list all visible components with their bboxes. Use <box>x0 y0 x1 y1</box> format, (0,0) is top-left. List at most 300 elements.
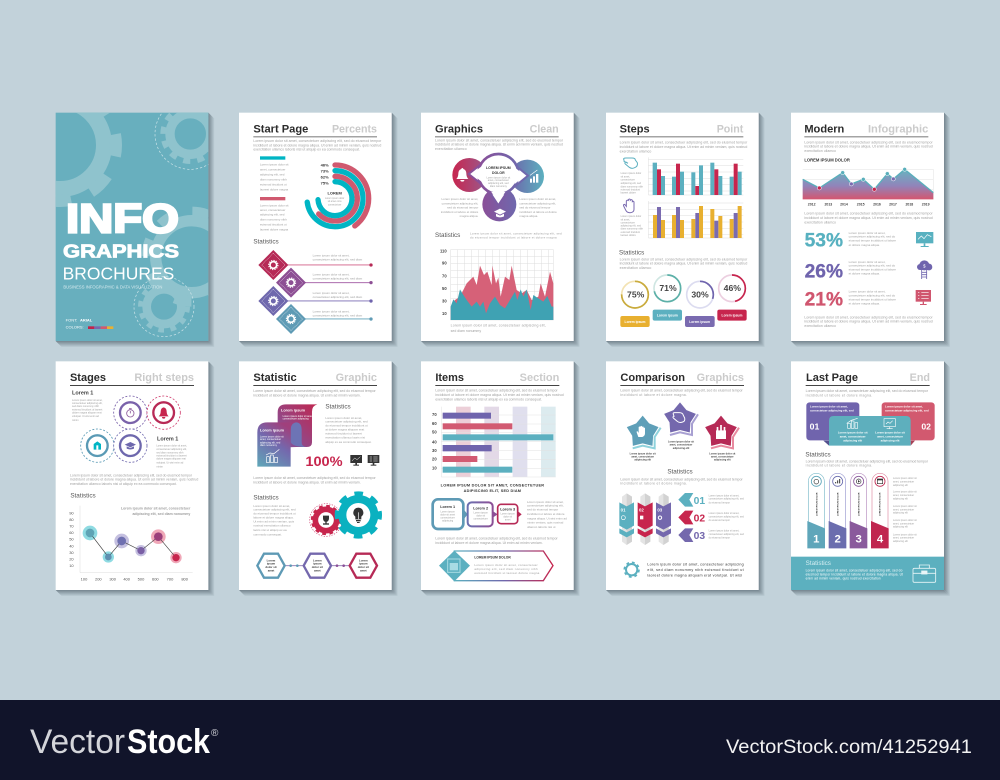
steps text upper: laoreet dolore <box>621 192 636 195</box>
star captions: amet, consectetuer <box>631 455 654 458</box>
steps text lower: sit amet, <box>621 218 630 221</box>
chart text: incididunt ut labore et dolore magna aliqua. Ut enim ad minim veniam, quis nostrud <box>804 216 933 220</box>
heading: Graphic <box>336 372 377 384</box>
heading: Items <box>435 372 464 384</box>
intro text <box>253 389 376 397</box>
progress rings <box>622 275 745 308</box>
pillar 4 <box>871 473 889 548</box>
isometric columns <box>619 493 671 545</box>
banner with diamond icon: Lorem ipsum dolor sit amet, consectetuer <box>474 563 538 567</box>
text block lower: laoris nisi ut aliquip ex ea <box>253 528 287 532</box>
heading: Right steps <box>134 372 194 384</box>
statistics text: adipiscing elit, sed diam nonummy <box>132 512 190 516</box>
heading <box>253 372 377 386</box>
star captions: adipiscing elit <box>634 459 651 462</box>
chart caption: sed diam nonummy <box>451 329 481 333</box>
heading <box>253 123 377 137</box>
numbered pillars <box>807 473 889 548</box>
middle text: Lorem ipsum dolor sit amet, consectetuer adipiscing elit, sed do eiusmod tempor <box>435 537 558 541</box>
steps text lower: euismod tincidunt <box>621 231 640 234</box>
intro text: incididunt ut labore et dolore magna. <box>620 393 687 397</box>
closing text: Lorem ipsum dolor sit amet, consectetuer adipiscing elit, sed do eiusmod tempor <box>804 315 933 319</box>
steps text upper: adipiscing elit, sed <box>621 182 642 185</box>
hexagon process: dolor sit <box>358 565 369 569</box>
text column with colour bars: laoreet dolore magna <box>260 227 289 231</box>
subheading: ADIPISCING ELIT, SED DIAM <box>464 489 521 493</box>
steps text upper: sit amet, <box>621 175 630 178</box>
text column with colour bars: euismod tincidunt ut <box>260 182 287 186</box>
labelled buttons: Lorem ipsum <box>625 320 645 324</box>
logo: Vector <box>30 723 125 761</box>
heading: statistics lower: Statistics <box>253 494 279 501</box>
star captions: adipiscing elit <box>673 447 689 450</box>
pillar 3 <box>850 473 867 548</box>
text block: lorem 1: volutpat. Ut wisi enim ad <box>72 415 100 418</box>
circle diagram: DOLOR <box>492 171 505 175</box>
flanking text: consectetuer adipiscing elit, <box>519 201 556 205</box>
stat: 21% <box>805 289 931 310</box>
cover title: BROCHURES <box>63 263 174 283</box>
folded ribbons: amet, consectetuer <box>260 438 281 441</box>
horizontal bar chart: 50 <box>432 429 437 434</box>
statistics text: Lorem ipsum dolor sit amet, consectetuer adipiscing elit, sed do eiusmod tempor <box>620 257 748 261</box>
colour swatch bar <box>88 326 113 329</box>
cover title: COLORS: <box>66 325 84 330</box>
panel: last page <box>791 361 950 596</box>
area chart: 110 <box>440 248 447 253</box>
labelled buttons: Lorem ipsum <box>657 314 678 318</box>
intro text: Lorem ipsum dolor sit amet, consectetuer adipiscing elit, sed do eiusmod tempor <box>804 140 933 144</box>
flanking text: sed do eiusmod tempor <box>519 206 551 210</box>
numbered chevrons: Lorem ipsum dolor sit amet, <box>709 530 740 533</box>
pillar 4: 4 <box>877 534 884 546</box>
icon: outlined bars <box>847 418 858 428</box>
bubble line chart: 400 <box>123 576 131 581</box>
hexagon process: amet <box>268 568 274 572</box>
panel: statistic <box>239 361 398 596</box>
footer band: eiusmod tempor incididunt ut labore et dolore magna aliqua. Ut <box>806 573 903 577</box>
text block: aliquip ex ea commodo consequat. <box>325 440 372 444</box>
heading: Steps <box>620 123 650 135</box>
text block lower: Ut enim ad minim veniam, quis <box>253 520 295 524</box>
banner with diamond icon: LOREM IPSUM DOLOR <box>474 556 511 560</box>
intro text: exercitation ullamco <box>804 149 836 153</box>
text block: consectetuer adipiscing elit, <box>527 504 564 508</box>
text block: lorem 1 right: dolore magna aliquam erat <box>156 458 186 461</box>
overlapping info cards: consectetuer adipiscing elit, sed <box>885 409 929 413</box>
stat: 26%: Lorem ipsum dolor sit amet, <box>849 260 886 264</box>
pillar 1 <box>807 473 825 548</box>
bubble line chart: 600 <box>152 576 159 581</box>
heading: Last Page <box>806 372 858 384</box>
text column with colour bars: euismod tincidunt ut <box>260 223 287 227</box>
connected boxes: Lorem 3 <box>500 507 515 511</box>
heading: Stages <box>70 372 106 384</box>
statistics text: incididunt ut labore et dolore magna. <box>806 464 872 468</box>
statistics text: Lorem ipsum dolor sit amet, consectetuer adipiscing elit, sed do eiusmod tempor <box>806 460 929 464</box>
numbered chevrons: do eiusmod tempor <box>709 501 730 504</box>
banner with diamond icon <box>439 551 553 581</box>
intro text: Lorem ipsum dolor sit amet, consectetuer adipiscing elit, sed do eiusmod tempor <box>806 389 929 393</box>
area chart: years: 2018 <box>905 203 913 207</box>
heading: Graphics <box>435 123 483 135</box>
bubble line chart: 200 <box>95 576 102 581</box>
heading: Start Page <box>253 123 308 135</box>
middle text <box>435 537 558 545</box>
text block: Lorem ipsum dolor sit amet, <box>325 416 362 420</box>
numbered chevrons: consectetuer adipiscing elit, sed <box>709 498 744 501</box>
text block lower: nostrud exercitation ullamco <box>253 524 291 528</box>
statistics text: Lorem ipsum dolor sit amet, consectetuer <box>121 506 191 510</box>
connected boxes: Lorem ipsum <box>440 511 455 514</box>
progress rings: 71% <box>659 283 677 293</box>
pillar 2: LOREM IPSUM DOLOR <box>838 492 840 516</box>
star: pointing hand <box>664 402 698 435</box>
connected boxes <box>433 499 522 529</box>
hexagon process: amet <box>360 568 367 572</box>
steps text upper: consectetuer <box>621 179 635 182</box>
closing text: laoreet dolore magna aliquam erat volutpal. Ut wisi <box>647 574 742 578</box>
area chart: 70 <box>442 273 447 278</box>
intro text: incididunt ut labore et dolore magna. <box>806 393 872 397</box>
bubble line chart: 30 <box>69 550 74 555</box>
bar chart: teal and red <box>648 157 743 195</box>
text block: lorem 1 right: Lorem 1 <box>157 436 178 442</box>
circle diagram: Lorem ipsum dolor sit <box>486 176 511 179</box>
subheading: LOREM IPSUM DOLOR SIT AMET, CONSECTETUER <box>441 483 544 487</box>
stat: 53% <box>805 231 933 252</box>
heading: statistics: Statistics <box>667 468 693 475</box>
column 03: 03 <box>657 508 663 513</box>
icon: dark monitors <box>350 455 379 466</box>
text block lower: consectetuer adipiscing elit, sed <box>253 508 296 512</box>
stage: bell <box>147 396 180 429</box>
text block: minim veniam, quis nostrud <box>527 521 564 525</box>
radial percent chart: 73% <box>321 169 329 174</box>
chart caption <box>451 324 546 333</box>
statistics text: do eiusmod tempor incididunt ut labore et dolore magna <box>470 235 557 239</box>
bubble line chart: 700 <box>167 576 174 581</box>
numbered chevrons: Lorem ipsum dolor sit amet, <box>709 512 740 515</box>
gears: trophy and bulb <box>310 494 379 536</box>
text block: exercitation ullamco laoris nisi <box>325 436 365 440</box>
bubble line chart: 20 <box>69 556 74 561</box>
cover title: ARIAL <box>80 318 93 323</box>
subheading <box>441 483 544 493</box>
heading: Infographic <box>868 123 928 135</box>
connected boxes: consectetuer <box>441 517 455 520</box>
horizontal bar chart: 70 <box>432 412 437 417</box>
cover title: GRAPHICS <box>63 240 179 261</box>
text column with colour bars: diam nonummy nibh <box>260 177 287 181</box>
text block: lorem 1 right: minim <box>156 466 163 469</box>
steps text lower: Lorem ipsum dolor <box>621 215 641 218</box>
icon: bars and arrow <box>530 170 538 183</box>
radial percent chart: 62% <box>321 175 329 180</box>
statistics text: incididunt ut labore et dolore magna aliqua. Ut enim ad minim veniam, quis nostrud <box>620 262 747 266</box>
stat: 53%: et dolore magna aliqua. <box>849 243 880 247</box>
star captions: adipiscing elit <box>714 459 731 462</box>
radial percent chart: LOREM <box>327 191 343 196</box>
steps text lower: adipiscing elit, sed <box>621 225 642 228</box>
diamond timeline <box>258 250 373 334</box>
intro text: exercitation ullamco laboris nisi ut aliquip ex ea commodo consequat. <box>435 397 542 401</box>
intro text: Lorem ipsum dolor sit amet, consectetuer adipiscing elit, sed do eiusmod tempor <box>70 474 193 478</box>
heading: Percents <box>332 123 377 135</box>
hexagon process: ipsum <box>313 562 322 566</box>
text block: lorem 1: euismod tincidunt ut laoreet <box>72 408 103 411</box>
cover title: BUSINESS INFOGRAPHIC & DATA VISUALIZATION <box>63 284 162 289</box>
flanking text: Lorem ipsum dolor sit amet, <box>442 197 478 201</box>
connected boxes: Lorem 1 <box>440 505 456 509</box>
bubble line chart: 800 <box>181 576 189 581</box>
hexagon process: ipsum <box>267 562 276 566</box>
connected boxes: Lorem ipsum <box>473 512 488 515</box>
statistics text: Lorem ipsum dolor sit amet, consectetuer adipiscing elit, sed <box>470 231 562 235</box>
numbered chevrons: do eiusmod tempor <box>709 536 730 539</box>
folded ribbons: Lorem ipsum dolor sit amet, <box>283 415 314 418</box>
heading: Comparison <box>620 372 685 384</box>
intro text: Lorem ipsum dolor sit amet, consectetuer adipiscing elit, sed do eiusmod tempor <box>620 389 743 393</box>
text block: lorem 1 right <box>156 436 187 469</box>
closing text: Lorem ipsum dolor sit amet, consectetuer adipiscing <box>647 563 744 567</box>
folded ribbons <box>257 404 317 467</box>
folded ribbons: consectetuer adipiscing <box>283 418 309 421</box>
stat: 26%: 26% <box>805 261 843 282</box>
stage: stopwatch <box>114 396 147 429</box>
icon: gear <box>624 562 639 577</box>
flanking text: magna aliqua. <box>519 214 538 218</box>
text block: consectetuer adipiscing elit, sed <box>325 420 368 424</box>
star captions: Lorem ipsum dolor sit <box>668 440 694 443</box>
diamond timeline: Lorem ipsum dolor sit amet, <box>313 254 350 258</box>
radial percent chart <box>301 162 369 232</box>
hexagon process <box>257 554 377 578</box>
statistics text <box>470 231 562 239</box>
chart text: exercitation ullamco <box>804 220 836 224</box>
hexagon process: dolor sit <box>312 565 323 569</box>
folded ribbons: Lorem ipsum <box>281 408 306 412</box>
heading <box>620 123 744 137</box>
flanking text: Lorem ipsum dolor sit amet, <box>519 197 556 201</box>
heading: statistics: Statistics <box>805 451 831 458</box>
connected boxes: consectetuer <box>474 518 488 521</box>
icon: cloud and ladder: $ <box>923 263 926 268</box>
text column with colour bars: amet, consectetuer <box>260 167 285 171</box>
pillar descriptions: amet, consectetuer <box>893 522 914 525</box>
hexagon process: Lorem <box>267 558 276 562</box>
bubble line chart: 40 <box>69 543 74 548</box>
radial percent chart: consectetuer <box>328 203 342 206</box>
heading: statistics: Statistics <box>70 493 96 500</box>
numbered chevrons <box>678 493 744 542</box>
progress rings: 75% <box>627 289 645 299</box>
text block: ullamco laboris nisi ut <box>527 525 556 529</box>
stage: house <box>81 429 114 462</box>
icon: briefcase <box>913 565 936 582</box>
diamond timeline: Lorem ipsum dolor sit amet, <box>313 291 350 295</box>
column 01: 01 <box>621 508 626 513</box>
pillar 2: 2 <box>835 534 841 546</box>
chart heading: LOREM IPSUM DOLOR <box>804 158 850 163</box>
text column with colour bars: diam nonummy nibh <box>260 218 287 222</box>
panel: start page <box>239 113 398 347</box>
folded ribbons: Lorem ipsum <box>260 429 285 433</box>
overlapping info cards: Lorem ipsum dolor sit <box>838 430 868 434</box>
statistics text <box>620 477 743 486</box>
numbered chevrons: Lorem ipsum dolor sit amet, <box>709 494 740 497</box>
circle diagram: amet, consectetuer <box>488 179 509 182</box>
chart text <box>804 212 933 224</box>
heading: Modern <box>804 123 845 135</box>
progress rings: 30% <box>691 289 709 299</box>
text block: lorem 1 right: Lorem ipsum dolor sit amet, <box>156 445 187 448</box>
icon: monitor <box>916 232 933 247</box>
icon: bar chart <box>266 449 279 463</box>
text block: sed do eiusmod tempor <box>527 508 558 512</box>
bar chart: yellow and purple <box>648 201 743 238</box>
bubble line chart: 10 <box>69 563 74 568</box>
stat: 26%: consectetuer adipiscing elit, sed do <box>849 264 895 268</box>
intro text <box>435 138 564 151</box>
circle diagram <box>452 154 544 221</box>
intro text: exercitation ullamco <box>620 149 651 153</box>
text block: lorem 1: sed diam nonummy nibh <box>72 405 100 408</box>
hexagon process: Lorem <box>313 558 322 562</box>
text block lower: commodo consequat. <box>253 532 282 536</box>
heading: Point <box>717 123 744 135</box>
star: cake <box>705 416 739 448</box>
text column with colour bars: amet, consectetuer <box>260 208 285 212</box>
icon: pointing hand <box>624 158 637 168</box>
horizontal bar chart: 20 <box>432 457 437 462</box>
flanking text: incididunt ut labore et dolore <box>519 210 557 214</box>
text column with colour bars: laoreet dolore magna <box>260 187 289 191</box>
pillar descriptions: Lorem ipsum dolor sit <box>893 519 917 522</box>
footer band <box>791 557 944 590</box>
labelled buttons: Lorem ipsum <box>689 320 710 324</box>
intro text <box>253 139 382 152</box>
steps text upper <box>621 172 644 195</box>
star captions: amet, consectetuer <box>711 455 734 458</box>
overlapping info cards: Lorem ipsum dolor sit amet, <box>810 404 848 408</box>
heading: Section <box>520 372 559 384</box>
cover title: INFO <box>66 196 179 242</box>
text block: magna aliqua. Ut wisi enim ad <box>527 516 567 520</box>
horizontal bar chart: 40 <box>432 439 437 444</box>
intro text: incididunt ut labore et dolore magna aliqua. Ut enim ad minim veniam. <box>253 393 361 397</box>
text block: lorem 1: Lorem ipsum dolor sit amet, <box>72 399 103 402</box>
footer band: Statistics <box>806 560 831 567</box>
star captions: amet, consectetuer <box>670 444 692 447</box>
middle text: incididunt ut labore et dolore magna aliqua. Ut enim ad minim veniam. <box>435 541 543 545</box>
area chart: years <box>803 167 933 207</box>
bubble line chart: 60 <box>69 530 74 535</box>
numbered chevrons: 01 <box>694 496 705 507</box>
text block <box>325 416 372 444</box>
stat: 21%: consectetuer adipiscing elit, sed do <box>849 293 895 297</box>
area chart: years: 2016 <box>873 203 881 207</box>
numbered chevrons: 02 <box>694 513 705 524</box>
panel: comparison <box>606 361 765 596</box>
intro text: Lorem ipsum dolor sit amet, consectetuer adipiscing elit, sed do eiusmod tempor <box>435 138 564 142</box>
radial percent chart: 46% <box>321 162 329 167</box>
footer band: enim ad minim veniam, quis nostrud exercitation <box>806 577 881 581</box>
pillar descriptions: Lorem ipsum dolor sit <box>893 505 917 508</box>
text block: lorem 1 right: consectetuer adipiscing elit, <box>156 448 187 451</box>
labelled buttons <box>620 310 747 327</box>
overlapping info cards: amet, consectetuer <box>840 434 866 438</box>
area chart: 90 <box>442 261 447 266</box>
area chart: years: 2015 <box>857 203 865 207</box>
pillar descriptions: adipiscing elit <box>893 497 908 500</box>
statistics text: incididunt ut labore et dolore magna. <box>620 482 687 486</box>
circle diagram: adipiscing elit, sed <box>488 182 509 185</box>
area chart: years: 2013 <box>824 203 832 207</box>
progress rings: 46% <box>724 283 741 293</box>
horizontal bar chart <box>432 407 556 477</box>
heading: statistics: Statistics <box>435 232 460 239</box>
radial percent chart: 75% <box>321 181 329 186</box>
column 02: 02 <box>639 508 644 513</box>
panel: graphics <box>421 113 580 347</box>
cover title: FONT: <box>66 318 77 323</box>
stat: 26%: et dolore magna aliqua. <box>849 272 880 276</box>
text column with colour bars: Lorem ipsum dolor sit <box>260 203 289 207</box>
intro text <box>806 389 929 397</box>
text block: lorem 1 right: euismod tincidunt ut laoreet <box>156 454 187 457</box>
logo <box>30 723 219 761</box>
stat: 26%: eiusmod tempor incididunt ut labore <box>849 268 896 272</box>
text column with colour bars <box>260 156 289 231</box>
stat: 21%: 21% <box>805 289 843 310</box>
numbered chevrons: consectetuer adipiscing elit, sed <box>709 533 744 536</box>
stat: 53%: Lorem ipsum dolor sit amet, <box>849 231 886 235</box>
heading: Clean <box>530 123 559 135</box>
icon: graduation cap <box>494 209 506 217</box>
closing text <box>804 315 933 328</box>
panel: stages <box>56 361 214 596</box>
overlapping info cards <box>806 402 935 446</box>
panel: steps <box>606 113 765 347</box>
pillar descriptions: Lorem ipsum dolor sit <box>893 491 917 494</box>
footer bar <box>0 700 1000 780</box>
labelled buttons: Lorem ipsum <box>722 314 742 318</box>
pillar 1: LOREM IPSUM DOLOR <box>816 492 818 516</box>
closing text: exercitation ullamco <box>804 324 836 328</box>
intro text: incididunt ut labore et dolore magna aliqua. Ut enim ad minim veniam, quis nostrud <box>435 393 564 397</box>
statistics text <box>121 506 191 516</box>
intro text: incididunt ut labore et dolore magna aliqua. Ut enim ad minim veniam, quis nostrud <box>253 143 381 147</box>
numbered chevrons: consectetuer adipiscing elit, sed <box>709 515 744 518</box>
diamond timeline: Lorem ipsum dolor sit amet, <box>313 309 350 313</box>
connected boxes: Lorem ipsum <box>500 512 515 515</box>
area chart: 10 <box>442 311 447 316</box>
heading <box>804 123 928 137</box>
diamond timeline: consectetuer adipiscing elit, sed diam <box>313 313 363 317</box>
image id: VectorStock.com/41252941 <box>726 736 972 758</box>
intro text: exercitation ullamco <box>435 147 467 151</box>
connected boxes: dolor sit <box>503 515 512 518</box>
connected boxes: amet <box>505 518 511 521</box>
icon: bell <box>456 168 468 182</box>
area chart <box>440 248 553 320</box>
intro text: Lorem ipsum dolor sit amet, consectetuer adipiscing elit, sed do eiusmod tempor <box>253 389 376 393</box>
text block: lorem 1 right: volutpat. Ut wisi enim ad <box>156 462 184 465</box>
stat: 53%: consectetuer adipiscing elit, sed do <box>849 235 895 239</box>
area chart: years: 2017 <box>889 203 897 207</box>
area chart: years: 2012 <box>808 203 816 207</box>
